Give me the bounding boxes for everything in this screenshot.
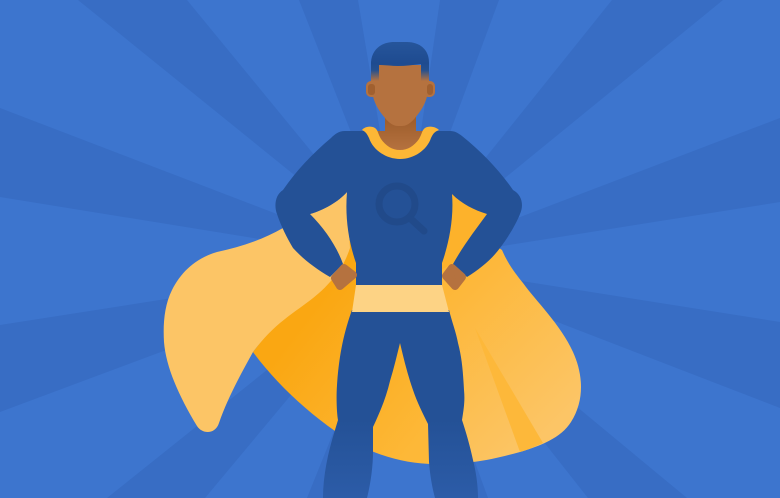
cape: right side xyxy=(430,194,581,464)
cape: orange inner left xyxy=(253,240,435,464)
collar xyxy=(362,127,439,159)
left ear outer xyxy=(366,81,378,97)
cape: light left xyxy=(164,192,350,432)
cape xyxy=(164,192,581,464)
icon: magnifying glass xyxy=(379,186,424,231)
belt xyxy=(352,285,449,312)
head xyxy=(372,65,428,126)
hair xyxy=(371,42,429,81)
right ear outer xyxy=(423,81,435,97)
torso and arms xyxy=(275,131,522,287)
neck xyxy=(375,112,425,152)
legs xyxy=(323,310,478,498)
right ear inner xyxy=(427,84,433,95)
cape: upper right panel xyxy=(440,194,488,270)
cape: right fold xyxy=(475,328,543,452)
right hand xyxy=(446,268,462,286)
left ear inner xyxy=(368,84,375,95)
left hand xyxy=(335,268,353,286)
